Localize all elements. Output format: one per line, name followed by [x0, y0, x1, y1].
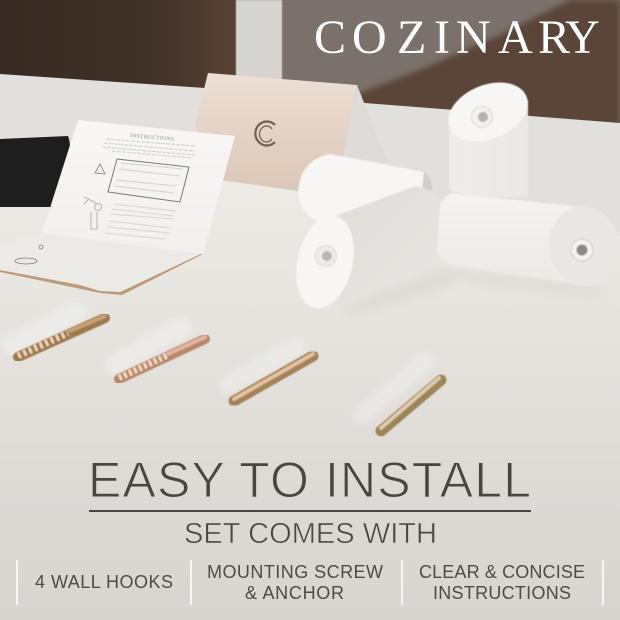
white back ledge: [0, 74, 620, 240]
screw and anchor set 4: [362, 362, 441, 431]
blurred background wall: [0, 0, 620, 130]
item: instructions: CLEAR & CONCISE: [419, 562, 585, 582]
item: mounting screw and anchor: & ANCHOR: [245, 583, 344, 603]
subheading: SET COMES WITH: [184, 518, 437, 550]
headline rule: [89, 510, 531, 512]
screw and anchor set 3: [228, 347, 313, 401]
card paragraph lines: [102, 139, 195, 158]
upright cylinder hook: [439, 71, 537, 197]
divider bars: [16, 560, 604, 605]
item: instructions: INSTRUCTIONS: [433, 583, 571, 603]
screw hole: [571, 239, 593, 261]
card lower text lines: [105, 204, 176, 239]
screw hole: [472, 106, 492, 128]
icon: warning triangle: [95, 164, 105, 174]
icon: person drilling drawing: [84, 197, 102, 229]
brand logo: COZINARY: [314, 11, 600, 64]
back lying cylinder hook: [298, 154, 432, 224]
screw and anchor set 2: [115, 328, 205, 379]
screw hole: [316, 246, 336, 266]
card warning box: [108, 159, 189, 202]
item: instructions: [419, 562, 585, 603]
icon: C logo on card: [255, 122, 275, 146]
heading on card: INSTRUCTIONS: [130, 133, 174, 143]
card bottom panel diagram: [15, 245, 43, 264]
screw and anchor set 1: [13, 312, 105, 357]
instruction card: [0, 120, 235, 295]
front left cylinder hook: [288, 186, 440, 314]
headline: EASY TO INSTALL: [88, 452, 531, 508]
item: mounting screw and anchor: [207, 562, 383, 603]
item: wall hooks: 4 WALL HOOKS: [35, 572, 173, 592]
item: mounting screw and anchor: MOUNTING SCREW: [207, 562, 383, 582]
right lying cylinder hook: [434, 193, 620, 290]
front table area behind objects: [0, 180, 620, 620]
beige tent card: [195, 73, 388, 192]
black cylinder: [0, 136, 70, 207]
soft shadows under hooks: [340, 268, 600, 315]
list: set contents: [16, 560, 604, 605]
